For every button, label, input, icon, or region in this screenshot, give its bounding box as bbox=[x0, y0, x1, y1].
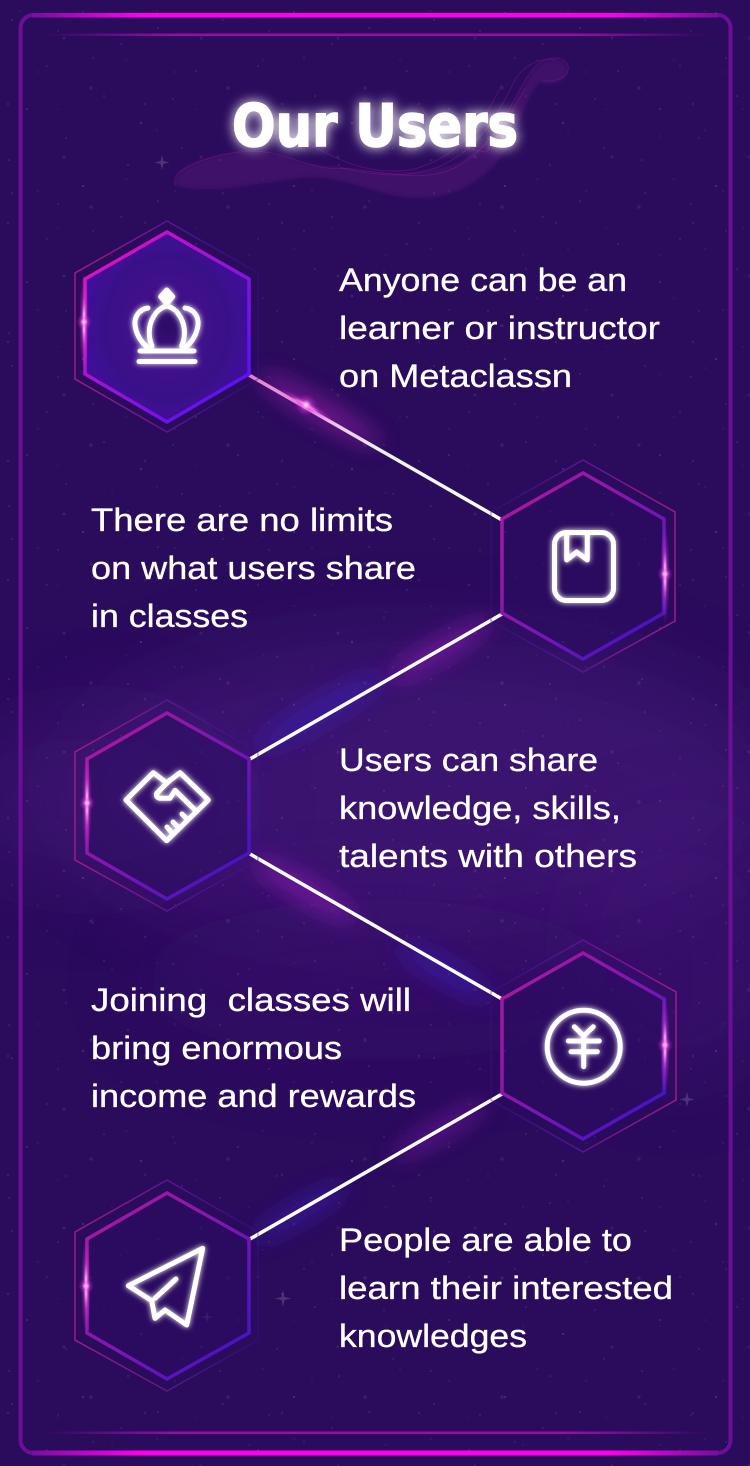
icon: crown bbox=[135, 290, 198, 362]
icon: handshake bbox=[126, 773, 208, 841]
text block 4: bring enormous bbox=[91, 1030, 342, 1066]
text block 1: on Metaclassn bbox=[339, 358, 572, 394]
text block 5: learn their interested bbox=[339, 1270, 673, 1306]
text block 2 bbox=[91, 502, 416, 634]
text block 2: There are no limits bbox=[91, 502, 393, 538]
text block 5: knowledges bbox=[339, 1318, 527, 1354]
glows along connector lines bbox=[247, 365, 498, 1248]
connector line 2 bbox=[250, 614, 502, 759]
text block 1 bbox=[339, 262, 660, 394]
text block 4: income and rewards bbox=[91, 1078, 416, 1114]
node 3: handshake bbox=[75, 700, 258, 911]
text block 3: knowledge, skills, bbox=[339, 790, 621, 826]
node 5: paper plane bbox=[75, 1180, 258, 1391]
text block 3: Users can share bbox=[339, 742, 598, 778]
icon: book bbox=[554, 532, 614, 600]
text block 1: Anyone can be an bbox=[339, 262, 627, 298]
text block 1: learner or instructor bbox=[339, 310, 660, 346]
text block 4 bbox=[91, 982, 416, 1114]
title: Our Users bbox=[232, 91, 518, 160]
node 1: crown bbox=[75, 221, 258, 432]
node 4: yuan coin bbox=[491, 940, 676, 1152]
connector line 4 bbox=[250, 1094, 502, 1239]
text block 4: Joining classes will bbox=[91, 982, 411, 1018]
text block 2: in classes bbox=[91, 598, 248, 634]
connector line 1 bbox=[249, 375, 502, 520]
connector line 3 bbox=[250, 854, 502, 999]
text block 3: talents with others bbox=[339, 838, 637, 874]
icon: yuan coin bbox=[547, 1010, 620, 1083]
icon: paper plane bbox=[128, 1248, 203, 1325]
text block 5: People are able to bbox=[339, 1222, 632, 1258]
decorative smoke wisp behind title bbox=[175, 58, 568, 198]
node 2: book bbox=[491, 460, 675, 672]
text block 5 bbox=[339, 1222, 673, 1354]
text block 2: on what users share bbox=[91, 550, 416, 586]
text block 3 bbox=[339, 742, 637, 874]
